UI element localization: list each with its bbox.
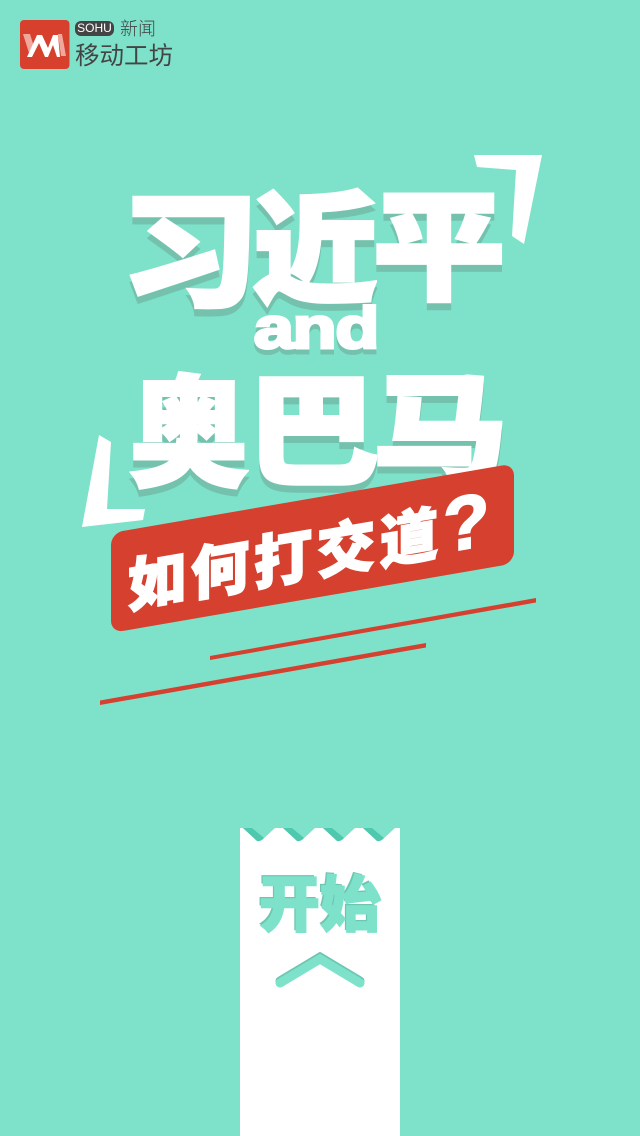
badge: SOHU: SOHU — [77, 21, 112, 35]
text: 移动工坊: 移动工坊 — [75, 43, 173, 70]
title: 习近平 and 奥巴马 — [121, 182, 507, 502]
ticket body with wavy top — [240, 828, 400, 1136]
glyph: 近: 近 — [253, 184, 377, 318]
glyph: 奥: 奥 — [129, 368, 249, 502]
icon: red W logo — [20, 20, 70, 69]
glyph: 平: 平 — [373, 182, 505, 316]
panel: start ticket — [240, 828, 400, 1136]
text: 开始: 开始 — [259, 871, 381, 939]
text: and: and — [254, 296, 378, 361]
text: 如何打交道?: 如何打交道? — [128, 477, 489, 620]
banner: 如何打交道? — [111, 463, 514, 633]
glyph: 巴: 巴 — [247, 366, 379, 500]
glyph: 马: 马 — [373, 366, 507, 500]
glyph: 习: 习 — [121, 186, 259, 324]
icon: up chevron — [276, 952, 364, 988]
text: 新闻: 新闻 — [120, 19, 156, 39]
logo: Sohu News Mobile Workshop — [20, 19, 173, 70]
